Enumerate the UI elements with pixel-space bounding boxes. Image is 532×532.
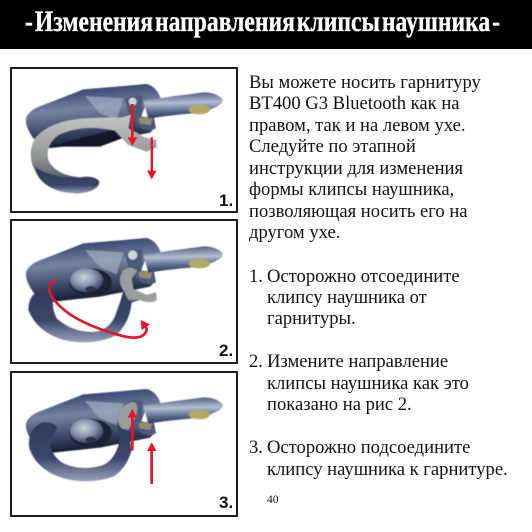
text block: intro: инструкции для изменения <box>249 158 463 179</box>
step number: 1. <box>219 191 233 210</box>
panel: step 3 <box>11 372 237 516</box>
text block: step 3 instruction: 3. <box>249 437 263 458</box>
text block: intro: Вы можете носить гарнитуру <box>249 72 481 93</box>
text block: step 3 instruction: клипсу наушника к гарнитуре. <box>267 459 508 480</box>
text block: step 1 instruction: клипсу наушника от <box>267 287 427 308</box>
illustration: reattaching the clip <box>26 389 223 484</box>
text block: intro: правом, так и на левом ухе. <box>249 115 465 136</box>
illustration: rotating the ear clip <box>26 238 223 342</box>
step number: 3. <box>219 493 233 512</box>
text block: step 2 instruction: 2. <box>249 351 263 372</box>
text block: step 1 instruction <box>249 266 460 329</box>
text block: intro: формы клипсы наушника, <box>249 179 454 200</box>
text block: intro: BT400 G3 Bluetooth как на <box>249 93 460 114</box>
page number: 40 <box>267 494 279 506</box>
arrow: curved rotation <box>49 281 150 338</box>
text block: intro <box>249 72 481 243</box>
arrow: clip moves up <box>128 409 157 484</box>
text block: step 2 instruction: клипсы наушника как это <box>267 373 469 394</box>
panel: step 2 <box>11 220 237 363</box>
text block: step 3 instruction <box>249 437 508 480</box>
text block: step 2 instruction <box>249 351 469 415</box>
arrow: clip moves down <box>128 104 157 179</box>
header bar <box>0 0 532 49</box>
text block: intro: позволяющая носить его на <box>249 201 468 222</box>
step number: 2. <box>219 341 233 360</box>
text block: step 1 instruction: гарнитуры. <box>267 308 356 329</box>
text block: step 3 instruction: Осторожно подсоедините <box>267 437 470 458</box>
text block: step 2 instruction: показано на рис 2. <box>267 394 412 415</box>
text block: step 1 instruction: 1. <box>249 266 263 287</box>
illustration: headset with detached ear clip <box>26 84 223 193</box>
text block: step 1 instruction: Осторожно отсоедините <box>267 266 460 287</box>
text block: step 2 instruction: Измените направление <box>267 351 448 372</box>
panel: step 1 <box>11 68 237 212</box>
text block: intro: Следуйте по этапной <box>249 136 416 157</box>
text block: intro: другом ухе. <box>249 222 340 243</box>
